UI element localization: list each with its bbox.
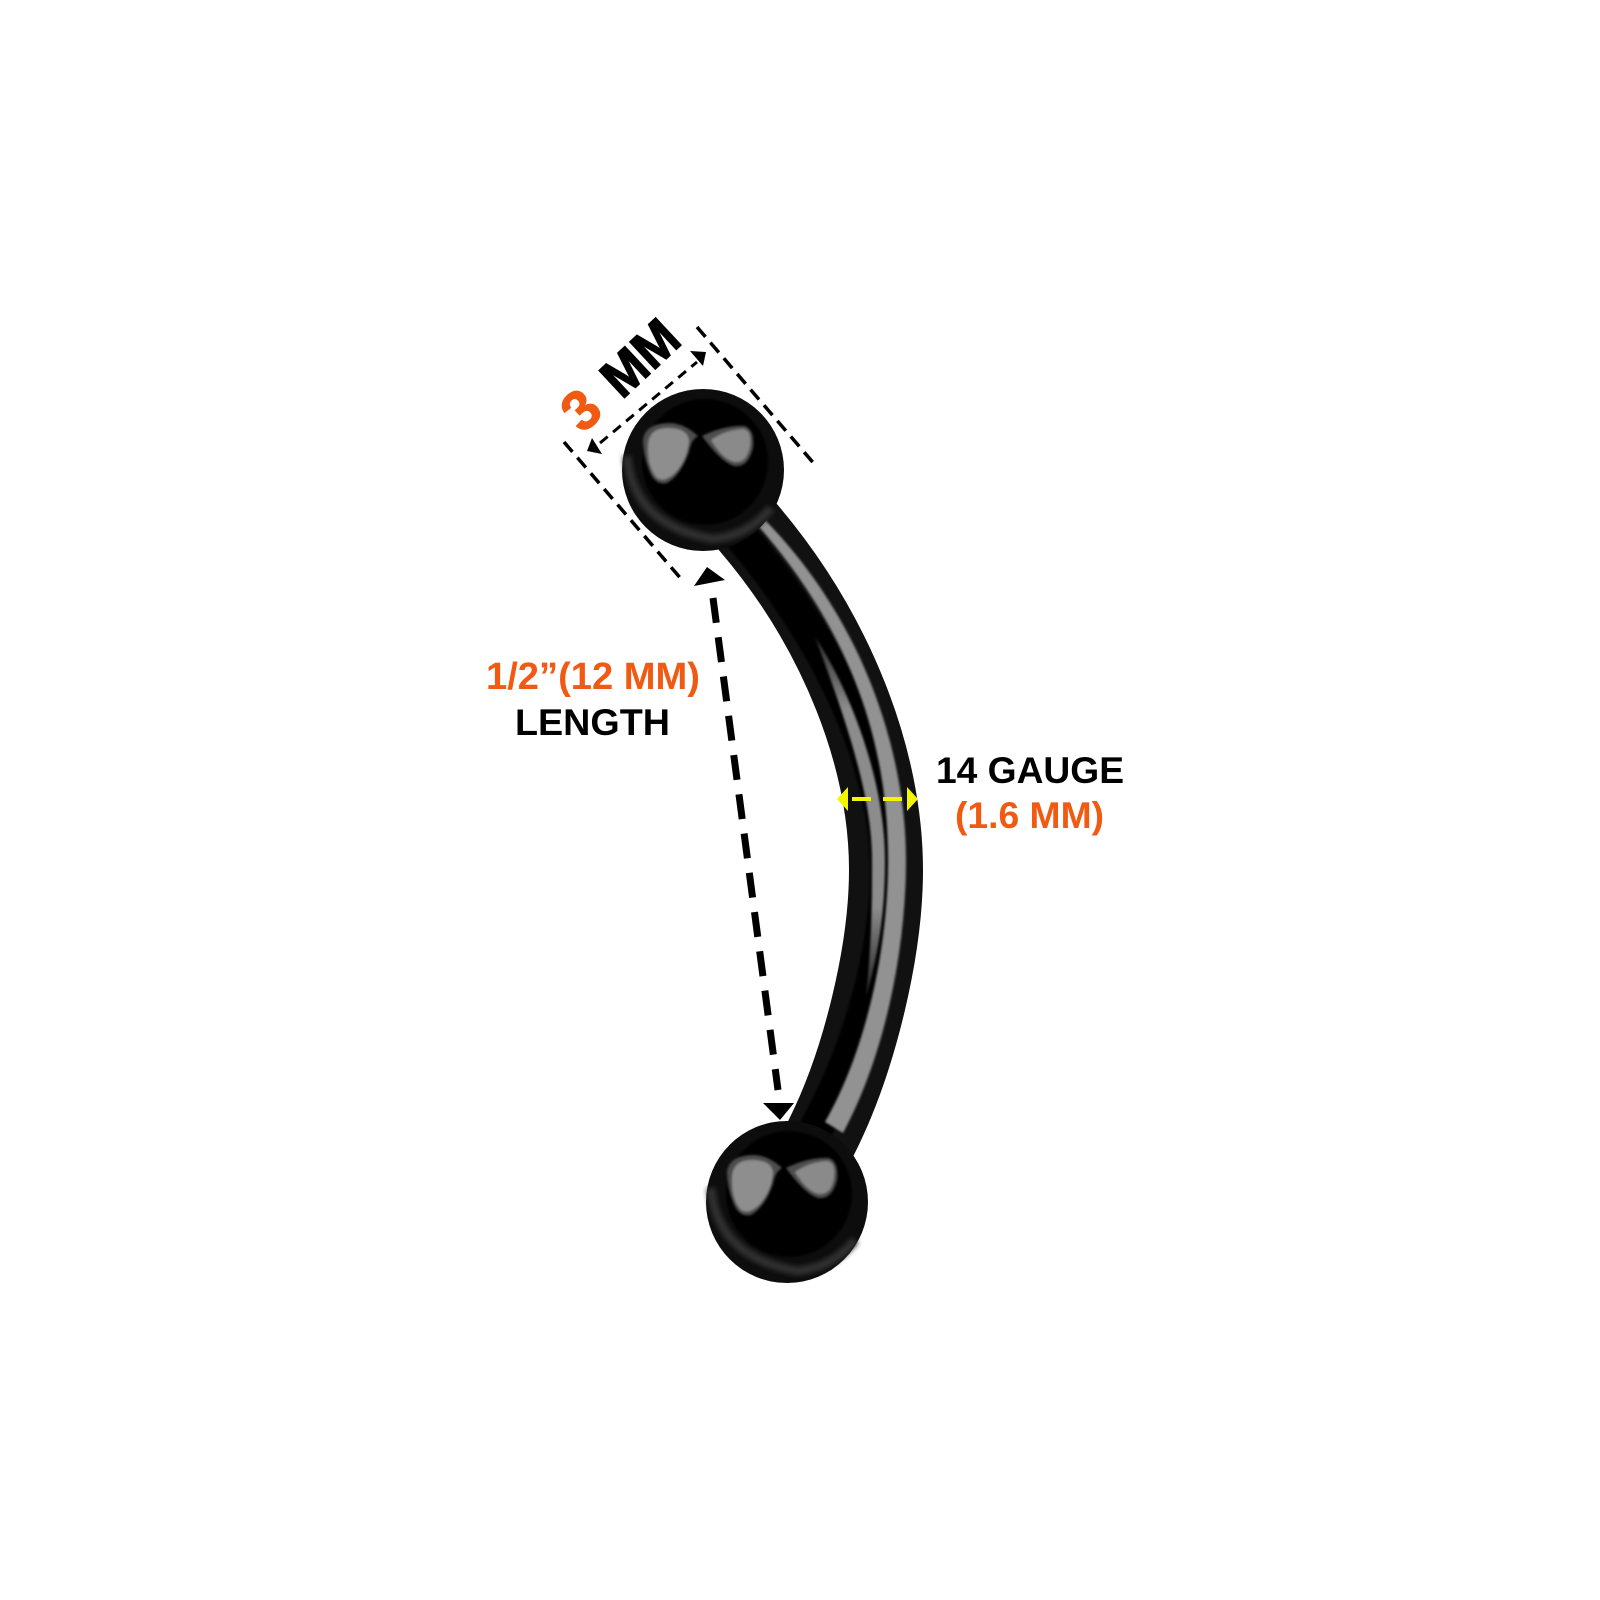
diameter arrow — [587, 351, 706, 454]
label: 3: 3 — [548, 376, 614, 443]
gauge label: (1.6 MM) — [955, 795, 1104, 836]
length label — [486, 656, 700, 743]
gauge label: 14 GAUGE — [936, 750, 1124, 791]
label: MM: MM — [589, 308, 692, 409]
shaft dark band — [730, 520, 887, 1130]
length label: LENGTH — [515, 702, 670, 743]
top ball — [622, 389, 784, 551]
right extension line — [697, 327, 816, 466]
curved barbell shaft — [730, 511, 906, 1150]
left glare — [643, 423, 698, 483]
secondary highlight stripe — [815, 637, 885, 997]
bottom ball — [706, 1121, 868, 1283]
left extension line — [564, 442, 682, 580]
gauge arrow — [837, 787, 918, 811]
right glare — [786, 1158, 837, 1198]
shaft body — [735, 511, 886, 1150]
ball diameter dimension — [548, 308, 816, 580]
gauge label — [936, 750, 1124, 836]
right glare — [702, 426, 753, 466]
length label: 1/2”(12 MM) — [486, 656, 700, 698]
left glare — [727, 1155, 782, 1215]
main highlight stripe — [753, 520, 906, 1133]
length arrow — [694, 567, 794, 1120]
